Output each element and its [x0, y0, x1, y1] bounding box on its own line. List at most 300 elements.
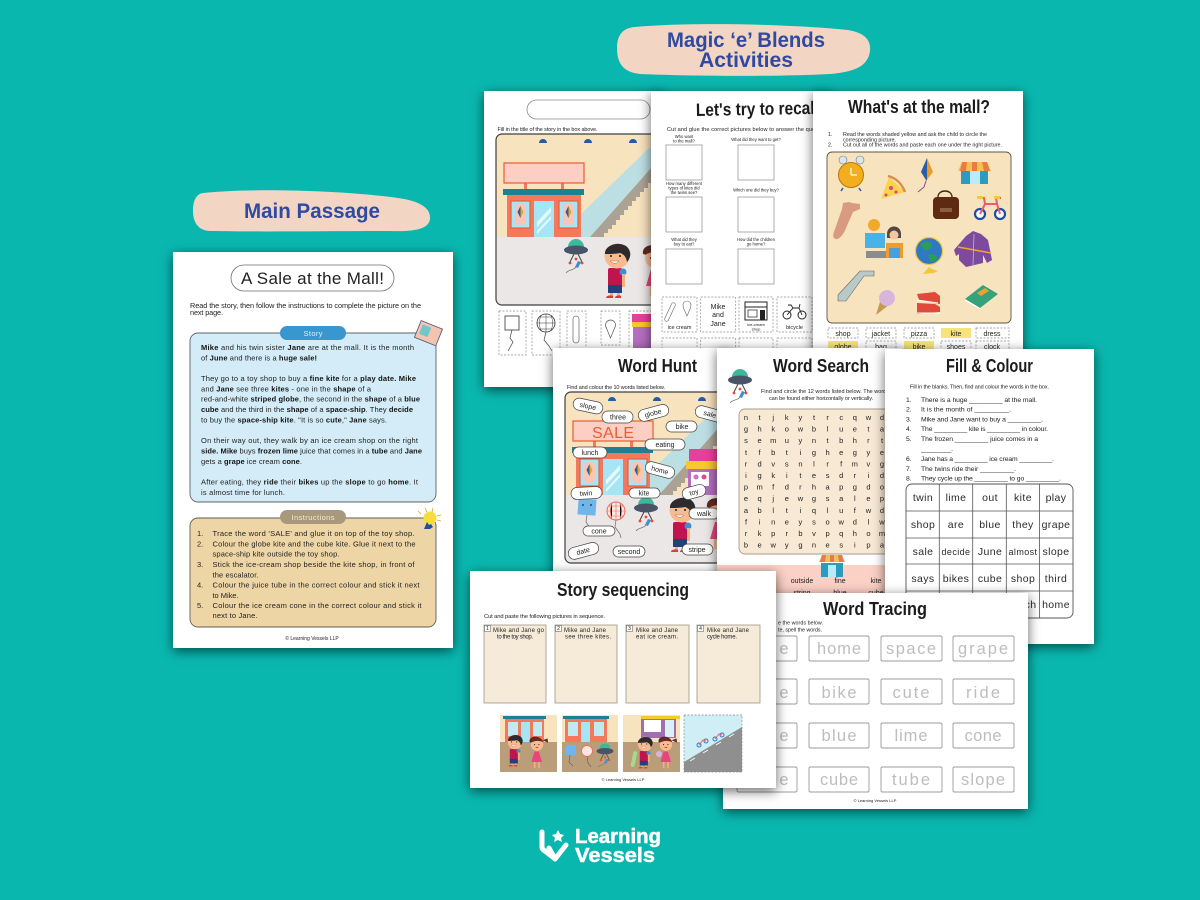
letter grid: g — [798, 541, 802, 550]
letter grid: e — [826, 541, 830, 550]
worksheet title: Fill & Colour — [946, 356, 1033, 376]
instructions box — [190, 510, 436, 627]
letter grid: o — [826, 517, 830, 526]
worksheet title: Word Hunt — [618, 356, 697, 376]
sequence boxes: see three kites. — [565, 634, 611, 640]
panel: what's at the mall worksheet — [813, 91, 1023, 387]
letter grid: d — [853, 517, 857, 526]
logo mark — [542, 830, 566, 859]
word labels: jacket — [871, 331, 890, 338]
tracing words: e — [779, 727, 789, 745]
instructions box: Stick the ice-cream shop beside the kite shop, in front of — [212, 560, 415, 569]
story box: to buy the space-ship kite. "It is so cute," Jane says. — [201, 416, 387, 424]
answer pieces: ice cream — [668, 325, 692, 331]
word colouring table: home — [1042, 599, 1070, 611]
letter grid: w — [878, 517, 885, 526]
instruction text — [761, 389, 889, 402]
instructions box: Colour the juice tube in the correct colour and stick it next — [212, 581, 420, 590]
word colouring table: lime — [946, 492, 966, 504]
letter grid: e — [785, 494, 789, 503]
heading: main passage — [193, 190, 430, 231]
word labels: shop — [835, 331, 851, 338]
letter grid: d — [785, 483, 789, 492]
word colouring table: play — [1046, 492, 1067, 504]
letter grid: o — [880, 483, 884, 492]
heading: magic e blends activities: Activities — [699, 49, 793, 72]
letter grid: m — [879, 529, 885, 538]
word tags: toy — [689, 488, 700, 498]
letter grid: e — [839, 448, 843, 457]
letter grid: m — [770, 436, 776, 445]
letter grid: n — [812, 436, 816, 445]
instruction text: can be found either horizontally or vertically. — [769, 396, 873, 402]
tracing words: ride — [966, 684, 1000, 702]
letter grid: i — [868, 471, 870, 480]
question labels: Which one did they buy? — [733, 188, 780, 192]
word list strip: fine — [834, 578, 846, 585]
instructions box: next to Jane. — [212, 611, 258, 620]
letter grid: q — [812, 506, 816, 515]
letter grid: s — [826, 471, 830, 480]
girl — [643, 245, 673, 296]
story box: They go to a toy shop to buy a fine kite for a play date. Mike — [201, 374, 416, 383]
word colouring table: shop — [911, 519, 935, 531]
answer pieces: bicycle — [786, 325, 803, 331]
letter grid: d — [839, 471, 843, 480]
letter grid: i — [786, 471, 788, 480]
word list strip: string — [793, 590, 811, 597]
worksheet title: Word Search — [773, 356, 869, 376]
letter grid: o — [785, 425, 789, 434]
letter grid: i — [854, 541, 856, 550]
panel: fill and colour worksheet — [885, 349, 1094, 644]
word colouring table: blue — [979, 519, 1001, 531]
sequence boxes: Mike and Jane — [636, 628, 679, 634]
fill in the blanks sentences: 8. — [906, 476, 912, 482]
letter grid: t — [881, 436, 884, 445]
word colouring table: slope — [1042, 546, 1070, 558]
icon: striped globe kite — [607, 502, 625, 538]
instruction text: Fill in the blanks. Then, find and colour the words in the box. — [910, 384, 1049, 390]
icon: ice cream — [876, 290, 895, 315]
story box: cube and the third in the shape of a space-ship. They decide — [201, 405, 413, 414]
logo: learning vessels — [542, 826, 661, 867]
letter grid: p — [826, 529, 830, 538]
letter grid: l — [813, 459, 815, 468]
letter grid: t — [827, 436, 830, 445]
tracing word boxes — [737, 636, 1014, 792]
picture: seeing three kites — [562, 715, 618, 772]
fill in the blanks sentences: They cycle up the _________ to go _________. — [921, 476, 1061, 482]
word labels: pizza — [911, 331, 927, 338]
question labels: go home? — [747, 242, 766, 246]
word colouring table: are — [948, 519, 964, 531]
letter grid: n — [812, 541, 816, 550]
sequence boxes: Mike and Jane go — [493, 628, 545, 634]
word labels: clock — [984, 344, 1000, 351]
instructions box: the escalator. — [212, 570, 258, 579]
letter grid: a — [880, 541, 885, 550]
letter grid: l — [772, 506, 774, 515]
word labels: shoes — [947, 344, 966, 351]
fill in the blanks sentences: 7. — [906, 466, 912, 473]
instruction list: Read the words shaded yellow and ask the child to circle the — [843, 132, 987, 138]
instruction list: 1. — [828, 132, 832, 138]
letter grid: k — [758, 529, 762, 538]
icon: cashier — [865, 219, 903, 258]
fill in the blanks sentences: The frozen _________ juice comes in a — [921, 436, 1038, 443]
icon: light bulb — [418, 508, 441, 529]
word colouring table — [906, 484, 1073, 618]
word list strip: cube — [868, 590, 884, 597]
tracing words: cube — [820, 771, 858, 789]
letter grid: m — [756, 483, 763, 492]
question labels: What did they — [671, 237, 698, 242]
word tags: three — [610, 414, 626, 422]
icon: escalator — [838, 271, 874, 301]
instruction text: Find and circle the 12 words listed below. The words — [761, 389, 889, 395]
letter grid: p — [866, 541, 870, 550]
letter grid: a — [880, 425, 885, 434]
letter grid: h — [758, 425, 762, 434]
word tags: home — [650, 465, 669, 477]
letter grid — [739, 409, 904, 554]
word colouring table: cube — [978, 573, 1002, 585]
letter grid: q — [758, 494, 762, 503]
letter grid: i — [745, 471, 747, 480]
letter grid: t — [759, 413, 762, 422]
letter grid: s — [826, 494, 830, 503]
question labels: How many different — [666, 181, 703, 186]
sequence boxes: 4 — [699, 626, 702, 632]
letter grid: y — [799, 413, 803, 422]
icon: cube kite — [577, 498, 597, 528]
letter grid: d — [758, 459, 762, 468]
story box: Mike and his twin sister Jane are at the mall. It is the month — [201, 343, 414, 352]
letter grid: p — [880, 494, 884, 503]
heading: magic e blends activities — [617, 24, 870, 76]
sequence boxes: 1 — [486, 626, 489, 632]
letter grid: e — [744, 494, 748, 503]
letter grid: e — [785, 517, 789, 526]
logo wordmark: Learning — [575, 826, 661, 848]
sequence boxes: Mike and Jane — [707, 628, 750, 634]
letter grid: t — [786, 506, 789, 515]
letter grid: l — [827, 506, 829, 515]
panel: story sequencing worksheet — [470, 571, 776, 788]
letter grid: j — [771, 413, 774, 422]
sale sign text: SALE — [592, 425, 634, 442]
letter grid: u — [839, 425, 843, 434]
letter grid: v — [771, 459, 775, 468]
icon: space-ship kite — [634, 497, 658, 531]
fill in the blanks sentences: The _________ kite is _________ in colour. — [921, 426, 1048, 433]
tracing words: grape — [958, 640, 1008, 658]
instructions box: Colour the globe kite and the cube kite. Glue it next to the — [212, 539, 416, 548]
icon: jacket — [954, 231, 992, 267]
word tags: eating — [655, 442, 675, 449]
tracing words: bike — [822, 684, 856, 702]
word tags: twin — [580, 490, 593, 498]
copyright: © Learning Vessels LLP — [854, 798, 897, 803]
sequence boxes: eat ice cream. — [636, 634, 678, 640]
letter grid: g — [853, 483, 857, 492]
answer pieces — [662, 297, 812, 368]
letter grid: r — [745, 529, 748, 538]
panel: word tracing worksheet — [723, 593, 1028, 809]
letter grid: u — [839, 506, 843, 515]
letter grid: d — [880, 506, 884, 515]
question labels: to the mall? — [673, 138, 695, 144]
boy — [670, 498, 695, 552]
fill in the blanks sentences: It is the month of _________. — [921, 406, 1011, 414]
letter grid: a — [744, 506, 749, 515]
letter grid: b — [798, 529, 802, 538]
story box: and Jane see three kites - one in the shape of a — [201, 384, 372, 393]
word list strip — [717, 565, 902, 603]
icon: book — [965, 285, 998, 309]
logo wordmark: Vessels — [575, 845, 655, 867]
letter grid: y — [785, 541, 789, 550]
instructions box: 5. — [197, 601, 203, 610]
letter grid: a — [839, 494, 844, 503]
tracing words: lime — [894, 727, 928, 745]
word colouring table: shop — [1011, 573, 1035, 585]
word labels: bike — [913, 344, 926, 351]
tracing words: blue — [822, 727, 856, 745]
letter grid: m — [852, 459, 858, 468]
logo wordmark — [575, 826, 661, 867]
instruction list — [828, 132, 1002, 148]
instructions box: Instructions — [292, 513, 335, 522]
word tags: bike — [676, 424, 689, 431]
sequence boxes — [484, 625, 760, 703]
word tags: second — [618, 549, 640, 556]
instruction text: e the words below. — [778, 620, 823, 626]
letter grid: g — [812, 494, 816, 503]
letter grid: b — [744, 541, 748, 550]
letter grid: w — [865, 413, 872, 422]
word colouring table: kite — [1014, 492, 1032, 504]
story box: On their way out, they walk by an ice cream shop on the right — [201, 436, 419, 445]
word tags: walk — [696, 511, 711, 518]
letter grid: f — [772, 483, 775, 492]
question labels: buy to eat? — [674, 242, 695, 246]
instructions box: 3. — [197, 560, 203, 569]
mall scene — [565, 392, 790, 563]
letter grid: d — [880, 413, 884, 422]
word colouring table: says — [911, 573, 935, 585]
question labels: the twins see? — [671, 190, 698, 195]
letter grid: t — [813, 413, 816, 422]
letter grid: v — [812, 529, 816, 538]
instructions box: 1. — [197, 529, 203, 538]
icon: globe — [916, 238, 942, 274]
letter grid: y — [799, 436, 803, 445]
ice cream shop — [686, 449, 731, 495]
letter grid: t — [799, 471, 802, 480]
letter grid: b — [758, 506, 762, 515]
story box: gets a grape ice cream cone. — [201, 457, 302, 466]
panel: let's try to recall worksheet — [651, 91, 832, 387]
heading: main passage: Main Passage — [244, 200, 380, 223]
word tags: kite — [639, 490, 650, 498]
story box: is almost time for lunch. — [201, 488, 285, 497]
fill in the blanks sentences: 3. — [906, 416, 912, 424]
letter grid: i — [800, 448, 802, 457]
icon: book — [414, 321, 442, 346]
letter grid: f — [759, 448, 762, 457]
tracing words: e — [779, 771, 789, 789]
word tags: date — [576, 547, 591, 557]
tracing words: cute — [892, 684, 930, 702]
letter grid: q — [853, 413, 857, 422]
icon: space-ship kite — [728, 369, 752, 403]
word colouring table: lunch — [1009, 599, 1037, 611]
blank title pill — [527, 100, 650, 119]
word tags: slope — [579, 402, 597, 412]
fill in the blanks sentences: 5. — [906, 436, 912, 443]
letter grid: s — [812, 517, 816, 526]
fill in the blanks sentences: 4. — [906, 426, 912, 433]
word labels: globe — [834, 344, 852, 351]
letter grid: r — [786, 529, 789, 538]
story box: side. Mike buys frozen lime juice that comes in a tube and Jane — [201, 446, 422, 456]
letter grid: r — [799, 483, 802, 492]
letter grid: h — [853, 436, 857, 445]
letter grid: e — [866, 494, 870, 503]
letter grid: i — [759, 517, 761, 526]
letter grid: n — [771, 517, 775, 526]
letter grid: n — [744, 413, 748, 422]
letter grid: q — [839, 529, 843, 538]
fill in the blanks sentences: Jane has a _________ ice cream _________. — [921, 456, 1054, 463]
letter grid: p — [771, 529, 775, 538]
letter grid: g — [853, 448, 857, 457]
letter grid: t — [786, 448, 789, 457]
letter grid: l — [854, 494, 856, 503]
letter grid: d — [880, 471, 884, 480]
letter grid: h — [853, 529, 857, 538]
mall scene — [496, 134, 721, 305]
worksheet title: What's at the mall? — [848, 97, 990, 117]
sequence boxes: Mike and Jane — [564, 628, 607, 634]
word colouring table: almost — [1009, 547, 1038, 557]
letter grid: p — [839, 483, 843, 492]
letter grid: l — [827, 425, 829, 434]
picture: going to toy shop — [500, 715, 557, 772]
fill in the blanks sentences: 1. — [906, 397, 912, 404]
story box: Story — [304, 329, 323, 338]
word labels: dress — [983, 331, 1001, 338]
letter grid: r — [854, 471, 857, 480]
story box: of June and there is a huge sale! — [201, 353, 317, 362]
instruction list: 2. — [828, 142, 832, 148]
icon: clock — [838, 156, 864, 191]
letter grid: b — [771, 448, 775, 457]
icon: pizza — [881, 176, 905, 199]
fill in the blanks sentences: There is a huge _________ at the mall. — [921, 397, 1037, 404]
letter grid: u — [785, 436, 789, 445]
letter grid: w — [769, 541, 776, 550]
letter grid: h — [812, 483, 816, 492]
icon: shop — [819, 555, 845, 577]
word list strip: outside — [791, 578, 813, 585]
instruction text: Cut and paste the following pictures in sequence. — [484, 614, 605, 620]
instruction text: Cut and glue the correct pictures below to answer the questions. — [667, 127, 832, 133]
word colouring table: third — [1045, 573, 1067, 585]
letter grid: g — [880, 459, 884, 468]
letter grid: n — [798, 459, 802, 468]
word colouring table: twin — [913, 492, 933, 504]
word tags: cone — [591, 528, 607, 536]
word colouring table: decide — [942, 547, 970, 557]
word colouring table: bikes — [943, 573, 969, 585]
story box — [190, 326, 436, 502]
answer pieces: ice-cream — [747, 322, 765, 327]
letter grid: c — [839, 413, 843, 422]
letter grid: r — [826, 413, 829, 422]
letter grid: w — [865, 506, 872, 515]
instruction text: te, spell the words. — [778, 628, 822, 634]
instructions box: 2. — [197, 539, 203, 548]
letter grid: t — [745, 448, 748, 457]
letter grid: a — [826, 483, 831, 492]
letter grid: e — [812, 471, 816, 480]
letter grid: e — [758, 436, 762, 445]
instruction text: Find and colour the 10 words listed below. — [567, 385, 665, 391]
letter grid: o — [866, 529, 870, 538]
instruction list: corresponding picture. — [843, 138, 896, 144]
sequence boxes: 3 — [628, 626, 631, 632]
answer pieces: and — [712, 312, 724, 319]
answer pieces: shop — [752, 326, 761, 332]
letter grid: k — [771, 471, 775, 480]
panel: story title and picture worksheet — [484, 91, 721, 387]
letter grid: t — [867, 425, 870, 434]
picture: eating ice cream — [623, 715, 680, 772]
tracing words: home — [817, 640, 861, 658]
panel: word hunt worksheet — [553, 348, 790, 578]
word list strip: kite — [871, 578, 882, 585]
letter grid: i — [800, 506, 802, 515]
boy — [604, 244, 630, 298]
word tags: globe — [644, 408, 663, 420]
instruction text — [778, 620, 823, 634]
question labels: How did the children — [737, 237, 776, 242]
question labels: Who want — [675, 134, 694, 139]
sequence boxes: to the toy shop. — [497, 634, 533, 640]
copyright: © Learning Vessels LLP — [285, 635, 339, 642]
fill in the blanks sentences — [906, 397, 1061, 482]
letter grid: s — [744, 436, 748, 445]
word tags: sale — [703, 410, 717, 420]
story box: red-and-white striped globe, the second in the shape of a blue — [201, 395, 420, 404]
word colouring table: out — [982, 492, 998, 504]
fill in the blanks sentences: The twins ride their _________. — [921, 466, 1016, 473]
story title: A Sale at the Mall! — [241, 269, 384, 288]
letter grid: k — [771, 425, 775, 434]
letter grid: r — [826, 459, 829, 468]
letter grid: b — [839, 436, 843, 445]
picture panel — [827, 152, 1011, 323]
question labels: types of kites did — [668, 186, 700, 190]
instructions box: Colour the ice cream cone in the correct colour and stick it — [212, 601, 422, 610]
word labels — [828, 328, 1009, 351]
instructions box: 4. — [197, 581, 203, 590]
panel: main passage worksheet — [173, 252, 453, 648]
letter grid: v — [867, 459, 871, 468]
